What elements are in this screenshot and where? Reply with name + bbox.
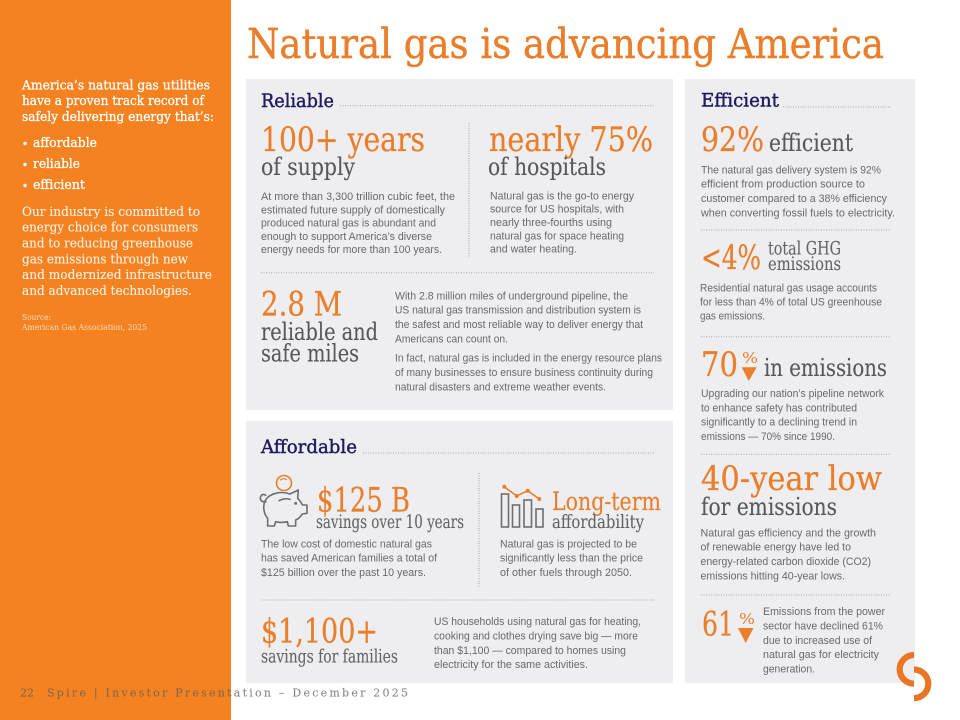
stat: nearly 75% of hospitals: and water heating. bbox=[490, 243, 577, 255]
stat: nearly 75% of hospitals: of hospitals bbox=[488, 153, 606, 181]
household savings description: US households using natural gas for heating, bbox=[434, 616, 641, 628]
stat: 100+ years of supply: of supply bbox=[261, 153, 355, 181]
sidebar commitment text: and modernized infrastructure bbox=[22, 268, 212, 283]
stat: 70% decline in emissions: significantly to a declining trend in bbox=[701, 417, 857, 429]
panel: reliable bbox=[246, 79, 673, 410]
stat: under 4% total GHG emissions: Residential natural gas usage accounts bbox=[700, 282, 877, 294]
pipeline description: Americans can count on. bbox=[395, 333, 508, 345]
sidebar commitment text bbox=[22, 205, 212, 299]
stat: under 4% total GHG emissions bbox=[700, 238, 882, 322]
pipeline description: the safest and most reliable way to deliver energy that bbox=[395, 319, 643, 331]
stat: 2.8 M reliable and safe miles: safe miles bbox=[261, 340, 359, 368]
stat: 40-year low for emissions: of renewable energy have led to bbox=[700, 542, 851, 554]
stat: 61% power sector decline: natural gas for electricity bbox=[763, 649, 879, 661]
icon: piggy bank bbox=[260, 476, 307, 526]
stat: 70% decline in emissions: % bbox=[742, 349, 758, 367]
stat: 70% decline in emissions: Upgrading our nation’s pipeline network bbox=[701, 388, 884, 400]
stat: $1,100+ savings for families: $1,100+ bbox=[261, 612, 378, 652]
stat: 100+ years of supply: enough to support America’s diverse bbox=[261, 231, 432, 243]
icon: bar chart with trend line bbox=[502, 485, 543, 527]
stat: long-term affordability: significantly less than the price bbox=[500, 553, 643, 565]
stat: 40-year low for emissions: energy-related carbon dioxide (CO2) bbox=[700, 556, 871, 568]
pipeline description: of many businesses to ensure business continuity during bbox=[395, 367, 653, 379]
sidebar intro text: America’s natural gas utilities bbox=[21, 78, 210, 93]
pipeline description: US natural gas transmission and distribution system is bbox=[395, 305, 641, 317]
pipeline description: natural disasters and extreme weather events. bbox=[395, 381, 606, 393]
stat: long-term affordability: Long-term bbox=[552, 487, 661, 517]
stat: nearly 75% of hospitals: nearly three-fourths using bbox=[490, 217, 612, 229]
stat: 100+ years of supply: energy needs for more than 100 years. bbox=[261, 244, 442, 256]
stat: long-term affordability: Natural gas is projected to be bbox=[500, 538, 637, 550]
stat: nearly 75% of hospitals: Natural gas is the go-to energy bbox=[490, 190, 634, 202]
sidebar commitment text: and to reducing greenhouse bbox=[22, 237, 193, 252]
stat: 100+ years of supply bbox=[261, 120, 455, 256]
stat: nearly 75% of hospitals: natural gas for space heating bbox=[490, 230, 624, 242]
stat: $125 B savings: has saved American families a total of bbox=[261, 553, 438, 565]
stat: 40-year low for emissions: for emissions bbox=[701, 493, 837, 521]
title: Natural gas is advancing America bbox=[247, 19, 884, 68]
sidebar commitment text: gas emissions through new bbox=[22, 252, 188, 267]
stat: 70% decline in emissions bbox=[701, 345, 887, 443]
orange sidebar bbox=[0, 0, 231, 720]
stat: under 4% total GHG emissions: for less than 4% of total US greenhouse bbox=[700, 296, 882, 308]
stat: 100+ years of supply: 100+ years bbox=[261, 120, 425, 160]
household savings description: cooking and clothes drying save big — more bbox=[434, 630, 638, 642]
panel: efficient bbox=[685, 79, 915, 683]
stat: 61% power sector decline: % bbox=[739, 610, 755, 628]
sidebar commitment text: and advanced technologies. bbox=[22, 284, 192, 299]
stat: 100+ years of supply: estimated future supply of domestically bbox=[261, 204, 445, 216]
stat: 2.8 M reliable and safe miles: reliable and bbox=[261, 318, 378, 346]
footer: page number and presentation name: 22 bbox=[20, 687, 34, 700]
stat: under 4% total GHG emissions: <4% bbox=[701, 238, 761, 278]
stat: 2.8 M reliable and safe miles: 2.8 M bbox=[261, 285, 342, 325]
stat: under 4% total GHG emissions: gas emissions. bbox=[700, 310, 765, 322]
stat: $125 B savings bbox=[261, 481, 464, 579]
household savings description: than $1,100 — compared to homes using bbox=[434, 645, 626, 657]
sidebar commitment text: energy choice for consumers bbox=[22, 221, 198, 236]
icon: down arrow bbox=[738, 628, 754, 643]
stat: under 4% total GHG emissions: total GHG bbox=[768, 238, 841, 259]
heading: affordable: Affordable bbox=[260, 436, 357, 458]
stat: 61% power sector decline bbox=[702, 605, 885, 675]
pipeline description: With 2.8 million miles of underground pipeline, the bbox=[395, 290, 628, 302]
stat: 70% decline in emissions: 70 bbox=[701, 345, 738, 385]
stat: 100+ years of supply: At more than 3,300 trillion cubic feet, the bbox=[261, 191, 455, 203]
stat: $125 B savings: $125 billion over the past 10 years. bbox=[261, 567, 426, 579]
sidebar intro text: safely delivering energy that’s: bbox=[22, 110, 214, 125]
stat: 61% power sector decline: Emissions from the power bbox=[763, 606, 885, 618]
sidebar commitment text: Our industry is committed to bbox=[22, 205, 200, 220]
stat: 61% power sector decline: 61 bbox=[702, 605, 734, 645]
stat: 92% efficient bbox=[700, 120, 895, 219]
stat: 70% decline in emissions: to enhance safety has contributed bbox=[701, 402, 857, 414]
stat: under 4% total GHG emissions: emissions bbox=[768, 254, 841, 275]
household savings description: electricity for the same activities. bbox=[434, 659, 588, 671]
source note bbox=[21, 313, 147, 333]
stat: 92% efficient: when converting fossil fuels to electricity. bbox=[700, 207, 895, 219]
stat: nearly 75% of hospitals: nearly 75% bbox=[489, 120, 653, 160]
source note: Source: bbox=[22, 313, 51, 323]
stat: 70% decline in emissions: in emissions bbox=[764, 354, 887, 382]
icon: down arrow bbox=[742, 367, 757, 381]
stat: 61% power sector decline: generation. bbox=[763, 663, 815, 675]
stat: long-term affordability bbox=[500, 487, 661, 579]
stat: 2.8 M reliable and safe miles bbox=[261, 285, 378, 368]
stat: nearly 75% of hospitals: source for US hospitals, with bbox=[490, 204, 624, 216]
stat: 40-year low for emissions: Natural gas efficiency and the growth bbox=[700, 527, 876, 539]
heading: efficient: Efficient bbox=[701, 90, 779, 112]
sidebar intro text bbox=[21, 78, 214, 125]
sidebar bullet list: efficient bbox=[33, 178, 86, 193]
stat: $125 B savings: The low cost of domestic natural gas bbox=[261, 538, 432, 550]
pipeline description bbox=[395, 290, 662, 393]
stat: 92% efficient: customer compared to a 38% efficiency bbox=[701, 193, 887, 205]
stat: $125 B savings: savings over 10 years bbox=[316, 512, 464, 533]
sidebar intro text: have a proven track record of bbox=[22, 94, 205, 109]
stat: 92% efficient: 92% bbox=[701, 120, 764, 160]
stat: 40-year low for emissions bbox=[700, 459, 882, 582]
sidebar bullet list: affordable bbox=[33, 136, 97, 151]
source note: American Gas Association, 2025 bbox=[21, 323, 147, 333]
stat: 70% decline in emissions: emissions — 70% since 1990. bbox=[701, 431, 835, 443]
household savings description bbox=[434, 616, 641, 671]
heading: reliable: Reliable bbox=[261, 90, 334, 112]
stat: 40-year low for emissions: 40-year low bbox=[701, 459, 882, 499]
stat: $125 B savings: $125 B bbox=[317, 481, 410, 521]
stat: 92% efficient: efficient from production source to bbox=[701, 179, 865, 191]
stat: 61% power sector decline: sector have declined 61% bbox=[763, 620, 883, 632]
stat: long-term affordability: of other fuels through 2050. bbox=[500, 567, 632, 579]
panel: affordable bbox=[246, 421, 673, 683]
stat: 61% power sector decline: due to increased use of bbox=[763, 635, 873, 647]
sidebar bullet list bbox=[23, 136, 97, 193]
pipeline description: In fact, natural gas is included in the energy resource plans bbox=[395, 353, 662, 365]
stat: 40-year low for emissions: emissions hitting 40-year lows. bbox=[700, 570, 845, 582]
sidebar bullet list: reliable bbox=[33, 157, 80, 172]
logo: Spire mark bbox=[900, 655, 928, 698]
stat: 92% efficient: efficient bbox=[769, 129, 853, 157]
stat: 100+ years of supply: produced natural gas is abundant and bbox=[261, 218, 436, 230]
footer: page number and presentation name: Spire | Investor Presentation – December 2025 bbox=[47, 687, 408, 701]
stat: $1,100+ savings for families bbox=[261, 612, 398, 668]
stat: nearly 75% of hospitals bbox=[488, 120, 653, 255]
stat: $1,100+ savings for families: savings for families bbox=[261, 647, 398, 668]
stat: long-term affordability: affordability bbox=[552, 512, 644, 533]
stat: 92% efficient: The natural gas delivery system is 92% bbox=[701, 164, 881, 176]
